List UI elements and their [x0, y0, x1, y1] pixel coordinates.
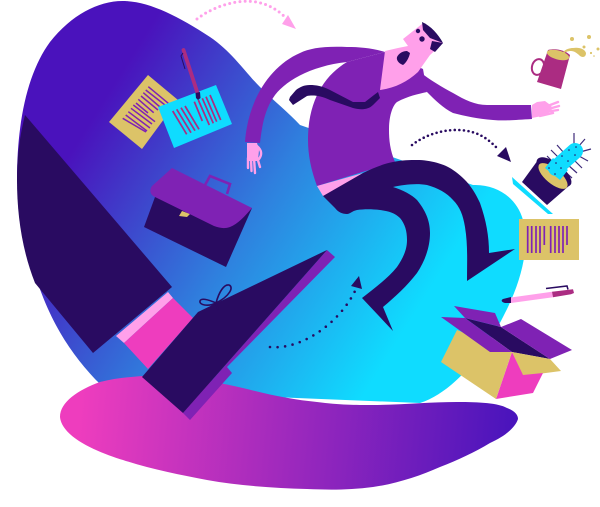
pen tip	[502, 297, 511, 303]
shirt waist	[317, 173, 363, 196]
case clasp	[179, 211, 190, 217]
pen	[502, 286, 574, 303]
right flap	[501, 319, 572, 359]
pen on paper	[184, 50, 198, 93]
left arm	[245, 47, 385, 143]
torso	[308, 52, 427, 186]
sock band	[116, 292, 173, 343]
pot	[522, 158, 570, 205]
right arm	[420, 72, 532, 120]
front right face	[496, 352, 543, 399]
pen clip	[546, 286, 568, 290]
man	[245, 22, 559, 331]
right hand	[532, 101, 559, 118]
arrow: dark dotted right	[412, 130, 511, 162]
tie	[289, 85, 380, 109]
open cardboard box	[441, 306, 572, 399]
cactus base	[545, 158, 568, 180]
cyan paper lines	[173, 95, 221, 134]
briefcase	[144, 168, 252, 267]
shoelace bow	[200, 285, 231, 310]
case handle	[205, 176, 230, 194]
pen cap	[552, 289, 574, 297]
paper lines	[528, 226, 567, 253]
trousers	[323, 160, 515, 331]
case body	[144, 197, 252, 267]
inner flap	[512, 352, 561, 376]
coffee drops	[570, 35, 600, 57]
yellow paper lines	[123, 87, 168, 132]
cyan paper	[158, 85, 232, 148]
sideburn	[430, 41, 443, 52]
soil	[534, 159, 572, 193]
coffee surface	[546, 48, 570, 62]
arrow: pink dotted top	[197, 1, 296, 29]
cactus body	[556, 151, 575, 168]
kicking leg	[17, 115, 335, 420]
hair top	[422, 22, 443, 43]
mug body	[537, 49, 570, 89]
back flap	[454, 306, 501, 327]
pen nib	[196, 92, 200, 100]
pot rim	[532, 152, 576, 192]
ankle	[124, 298, 193, 369]
left flap	[441, 317, 512, 352]
paper sheet	[519, 219, 579, 260]
pen barrel	[511, 292, 553, 303]
plate	[512, 177, 553, 214]
eye near	[416, 29, 420, 33]
background blob: blue gradient	[17, 1, 526, 403]
coffee splash	[563, 48, 586, 57]
neck and head	[380, 24, 443, 90]
shoe sole	[183, 250, 335, 420]
cactus in pot	[512, 133, 591, 214]
shoe upper	[142, 250, 327, 413]
left hand	[247, 143, 261, 173]
cactus spikes	[547, 133, 591, 178]
front left face	[441, 330, 512, 399]
mug handle	[530, 58, 546, 76]
arrow: dark dotted bottom	[270, 276, 362, 347]
trouser leg	[17, 115, 172, 353]
pen clip	[181, 53, 185, 69]
barcode paper	[519, 219, 579, 260]
coffee mug	[530, 35, 600, 89]
case flap	[150, 168, 252, 228]
floor blob: pink to purple	[60, 376, 518, 490]
cactus dots	[548, 146, 577, 175]
mouth	[397, 51, 410, 65]
documents and pen	[109, 50, 232, 149]
box interior	[465, 318, 550, 359]
yellow paper	[109, 75, 178, 149]
eye far	[419, 36, 425, 42]
